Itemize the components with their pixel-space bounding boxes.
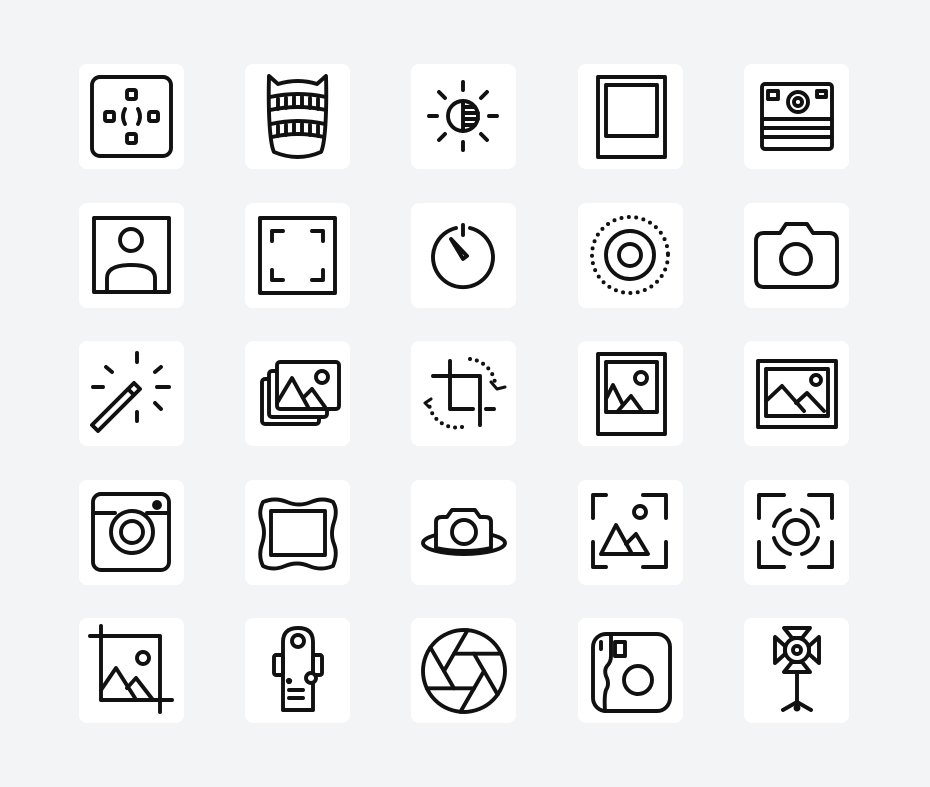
icon: landscape in corners — [578, 480, 683, 585]
icon: instagram — [79, 480, 184, 585]
icon: exposure sun — [411, 64, 516, 169]
icon: instax camera — [578, 618, 683, 723]
icon: focus target — [79, 64, 184, 169]
icon: portrait — [79, 203, 184, 308]
icon: polaroid frame — [578, 64, 683, 169]
icon: crop landscape — [79, 618, 184, 723]
icon: magic wand — [79, 341, 184, 446]
icon: aperture — [411, 618, 516, 723]
icon: lens — [245, 64, 350, 169]
icon: ornate frame — [245, 480, 350, 585]
icon: circle in corners — [744, 480, 849, 585]
icon: gallery stack — [245, 341, 350, 446]
icon: camera — [744, 203, 849, 308]
icon: light meter — [245, 618, 350, 723]
icon: landscape frame — [744, 341, 849, 446]
icon: dotted ring — [578, 203, 683, 308]
icon: studio light — [744, 618, 849, 723]
icon: camera on hat — [411, 480, 516, 585]
icon: crop rotate — [411, 341, 516, 446]
icon: focus frame — [245, 203, 350, 308]
icon: timer — [411, 203, 516, 308]
icon: instant camera — [744, 64, 849, 169]
icon: polaroid picture — [578, 341, 683, 446]
